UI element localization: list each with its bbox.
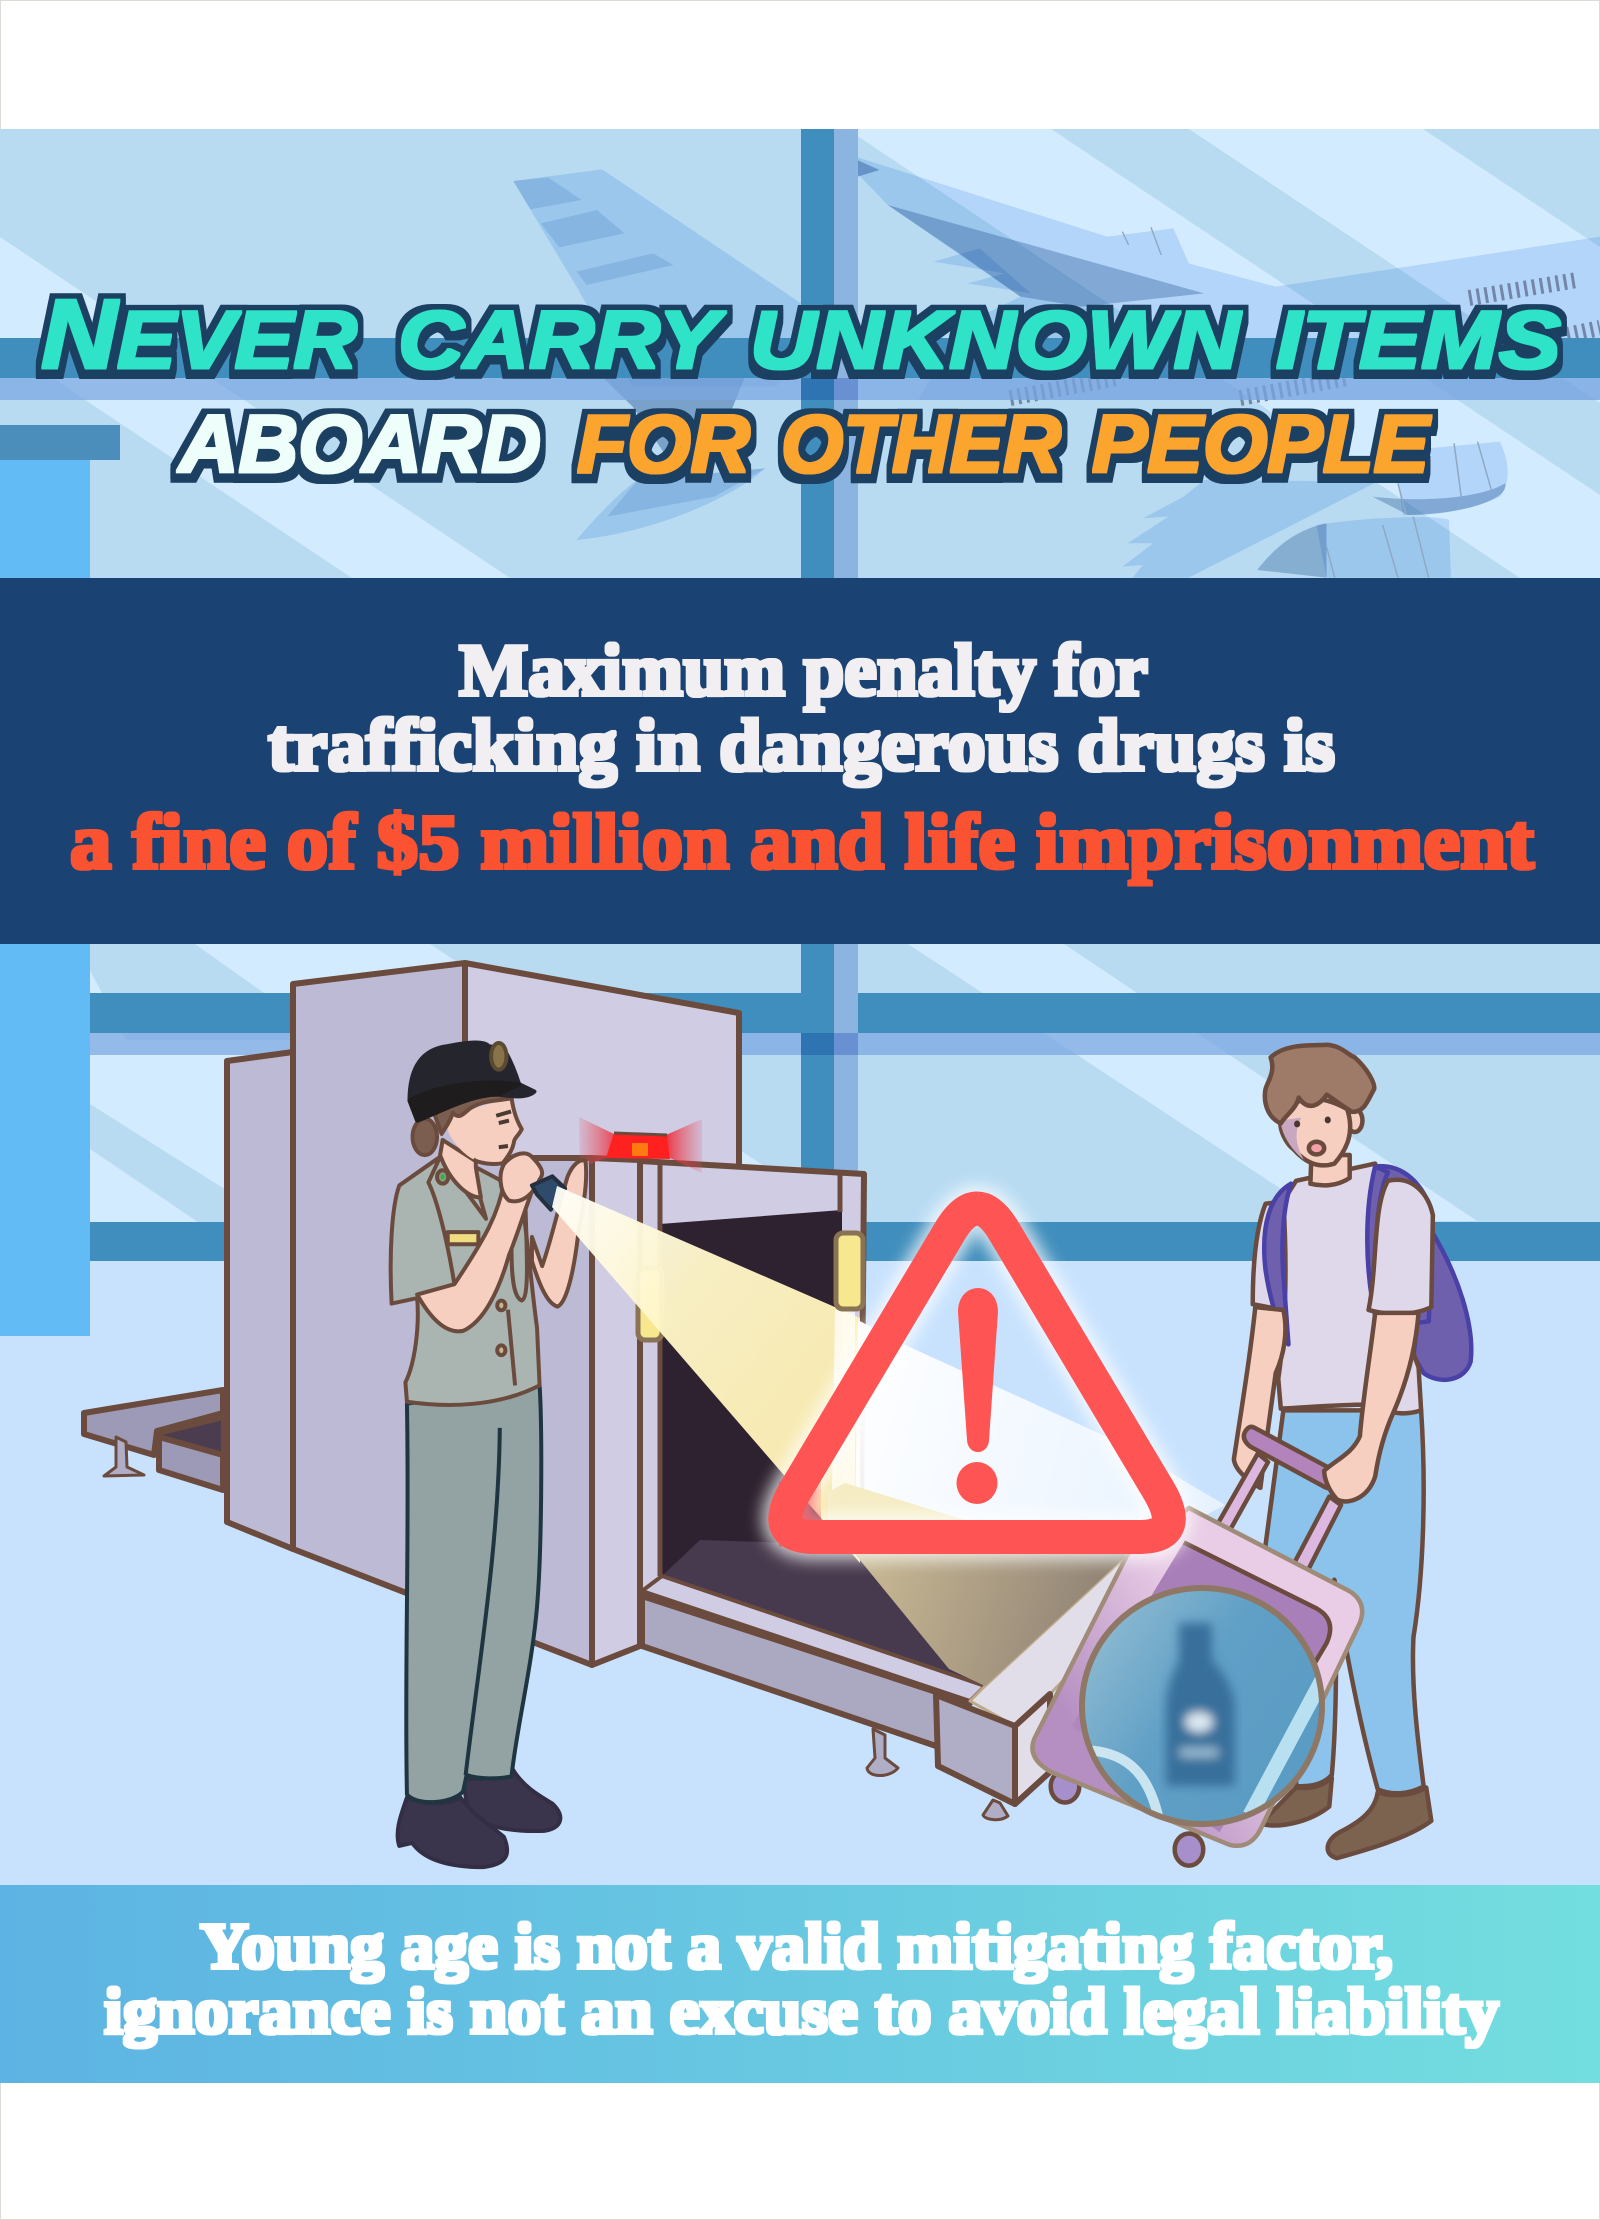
- flashlight beam: [552, 1186, 1225, 1686]
- backpack: [1368, 1166, 1471, 1380]
- title: ITEMS: [1276, 295, 1561, 386]
- penalty text: [70, 630, 1534, 885]
- scanner tunnel: [640, 1161, 1170, 1820]
- bottom message text: ignorance is not an excuse to avoid legal liability: [104, 1975, 1499, 2048]
- panel: airport window with plane: [0, 129, 1600, 578]
- officer shoes: [398, 1767, 560, 1867]
- suitcase panel edge: [1184, 1542, 1330, 1669]
- illustration: customs officer: [391, 1043, 586, 1867]
- suitcase grip: [1244, 1427, 1339, 1488]
- traveller t-shirt: [1253, 1164, 1421, 1413]
- title: UNKNOWN: [750, 295, 1242, 386]
- officer head: [409, 1043, 534, 1198]
- exclamation mark: [956, 1288, 998, 1504]
- panel: bottom message band: [0, 1885, 1600, 2083]
- officer shirt: [391, 1157, 540, 1405]
- scanner left conveyor: [84, 1390, 223, 1490]
- penalty text: Maximum penalty for: [459, 630, 1148, 712]
- title: CARRY: [398, 295, 726, 386]
- airplane cabin windows: [1010, 280, 1600, 398]
- title: [41, 279, 1561, 490]
- panel: checkpoint scene background: [0, 944, 1600, 1885]
- left scanner clip: [638, 1268, 662, 1340]
- illustration: traveller with backpack: [1234, 1045, 1471, 1858]
- penalty text: a fine of $5 million and life imprisonment: [70, 798, 1534, 885]
- penalty text: trafficking in dangerous drugs is: [268, 705, 1335, 787]
- title: FOR: [577, 399, 750, 490]
- magnifier with bottle: [1082, 1588, 1322, 1830]
- bottom message text: [104, 1910, 1499, 2048]
- illustration: airplane silhouette: [513, 150, 1600, 578]
- traveller left strap: [1264, 1184, 1291, 1344]
- window frame: [0, 129, 1600, 578]
- warning triangle icon: [785, 1208, 1169, 1537]
- traveller backpack strap front: [1367, 1166, 1388, 1327]
- title: OTHER: [781, 399, 1061, 490]
- suitcase handle bars: [1209, 1453, 1341, 1585]
- title: ABOARD: [177, 399, 541, 490]
- traveller right arm and hand: [1324, 1313, 1419, 1501]
- traveller jeans: [1266, 1410, 1424, 1793]
- bottom message text: Young age is not a valid mitigating factor,: [200, 1910, 1393, 1983]
- suitcase body: [1032, 1508, 1362, 1846]
- traveller left arm: [1234, 1307, 1285, 1488]
- suitcase wheels: [1051, 1770, 1203, 1866]
- illustration: suitcase: [1032, 1313, 1419, 1866]
- officer flashlight: [532, 1176, 565, 1210]
- blurred bottle: [1166, 1623, 1235, 1786]
- traveller sleeve: [1369, 1180, 1433, 1314]
- panel: penalty banner: [0, 578, 1600, 944]
- suitcase inner panel: [1072, 1542, 1330, 1832]
- title: NEVER: [41, 279, 357, 389]
- illustration: x-ray scanner: [84, 963, 1170, 1820]
- traveller shoes: [1260, 1778, 1431, 1858]
- title: PEOPLE: [1092, 399, 1431, 490]
- officer arms and hands: [417, 1153, 586, 1331]
- traveller head: [1265, 1045, 1374, 1185]
- right scanner clip: [836, 1233, 863, 1309]
- alarm light: [579, 1117, 702, 1173]
- officer trousers: [406, 1385, 541, 1802]
